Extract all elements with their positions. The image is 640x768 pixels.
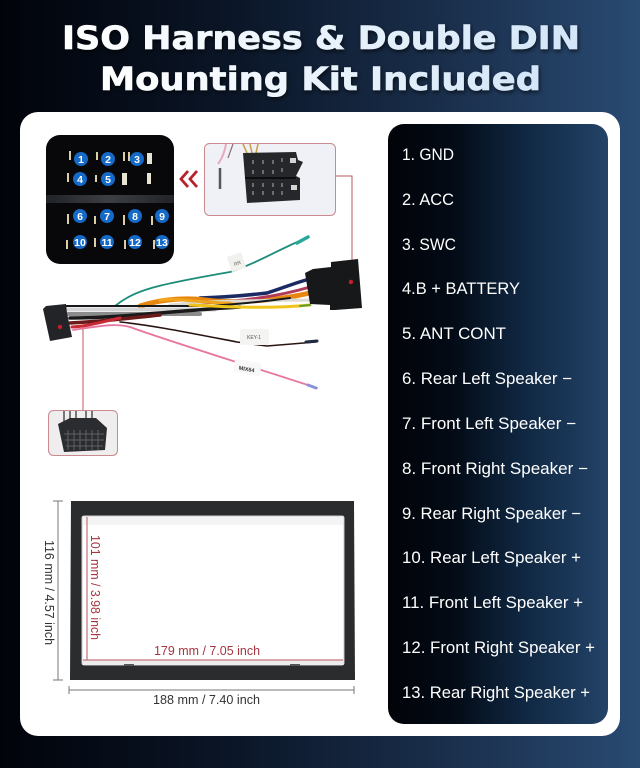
title: ISO Harness & Double DIN [62, 19, 580, 57]
pin numbers: 1 [78, 154, 84, 166]
pin numbers: 8 [132, 211, 138, 223]
wiring harness [66, 237, 317, 388]
pin numbers: 5 [105, 174, 111, 186]
pin list text: 9. Rear Right Speaker − [402, 505, 581, 523]
label: inner width: 179 mm / 7.05 inch [154, 643, 260, 658]
wire tag: key [240, 329, 269, 345]
pin list text: 10. Rear Left Speaker + [402, 549, 581, 567]
pin numbers: 7 [104, 211, 110, 223]
pin list text: 12. Front Right Speaker + [402, 639, 595, 657]
connector dots [58, 280, 353, 329]
pin number badges [73, 152, 169, 249]
door frame [70, 501, 355, 680]
pin list text: 13. Rear Right Speaker + [402, 684, 590, 702]
pin numbers: 4 [77, 174, 83, 186]
left harness connector [43, 304, 72, 341]
pin numbers: 11 [101, 237, 113, 249]
title: Mounting Kit Included [100, 60, 541, 98]
label: outer width: 188 mm / 7.40 inch [153, 692, 260, 707]
pin list text: 1. GND [402, 146, 454, 164]
pin list text: 8. Front Right Speaker − [402, 460, 588, 478]
pink wire [73, 325, 317, 388]
pin numbers: 6 [77, 211, 83, 223]
pin list text: 3. SWC [402, 236, 456, 254]
label: outer height: 116 mm / 4.57 inch [42, 540, 57, 645]
green antenna wire [115, 238, 307, 306]
pin list text: 6. Rear Left Speaker − [402, 370, 572, 388]
pin terminals [66, 151, 155, 249]
pin list text: 5. ANT CONT [402, 325, 506, 343]
wire tag: mic [233, 359, 262, 376]
icon: red chevrons [181, 171, 197, 187]
panel: pin list [388, 124, 608, 724]
wire bundle [66, 280, 310, 327]
callout: ISO connector photo [204, 144, 336, 216]
pin list text: 11. Front Left Speaker + [402, 594, 583, 612]
outer dimension lines [53, 501, 354, 694]
pin list text: 4.B + BATTERY [402, 280, 520, 298]
wire tag: mic: MIX64 [238, 366, 256, 374]
pin numbers: 13 [156, 237, 168, 249]
pin numbers: 12 [129, 237, 141, 249]
black key wire [120, 322, 316, 346]
wire tag: green: RR [233, 260, 242, 268]
pin numbers [74, 154, 168, 249]
panel: pin photo [46, 135, 174, 264]
pin numbers: 10 [74, 237, 86, 249]
callout: 16-pin connector photo [48, 410, 118, 456]
title [62, 19, 580, 98]
pin numbers: 2 [105, 154, 111, 166]
wire tag: key: KEY-1 [247, 335, 261, 341]
pin list text: 7. Front Left Speaker − [402, 415, 576, 433]
pin list text: 2. ACC [402, 191, 454, 209]
label: inner height: 101 mm / 3.98 inch [88, 535, 103, 640]
pin numbers: 9 [159, 211, 165, 223]
wire tag: green [227, 252, 246, 272]
red inner dimensions [83, 517, 343, 660]
leader line: 16-pin connector [82, 329, 84, 410]
pin list text [402, 146, 595, 702]
leader line: ISO connector [336, 176, 352, 282]
pin numbers: 3 [134, 154, 140, 166]
panel: white card [20, 112, 620, 736]
right harness connector [305, 259, 362, 310]
